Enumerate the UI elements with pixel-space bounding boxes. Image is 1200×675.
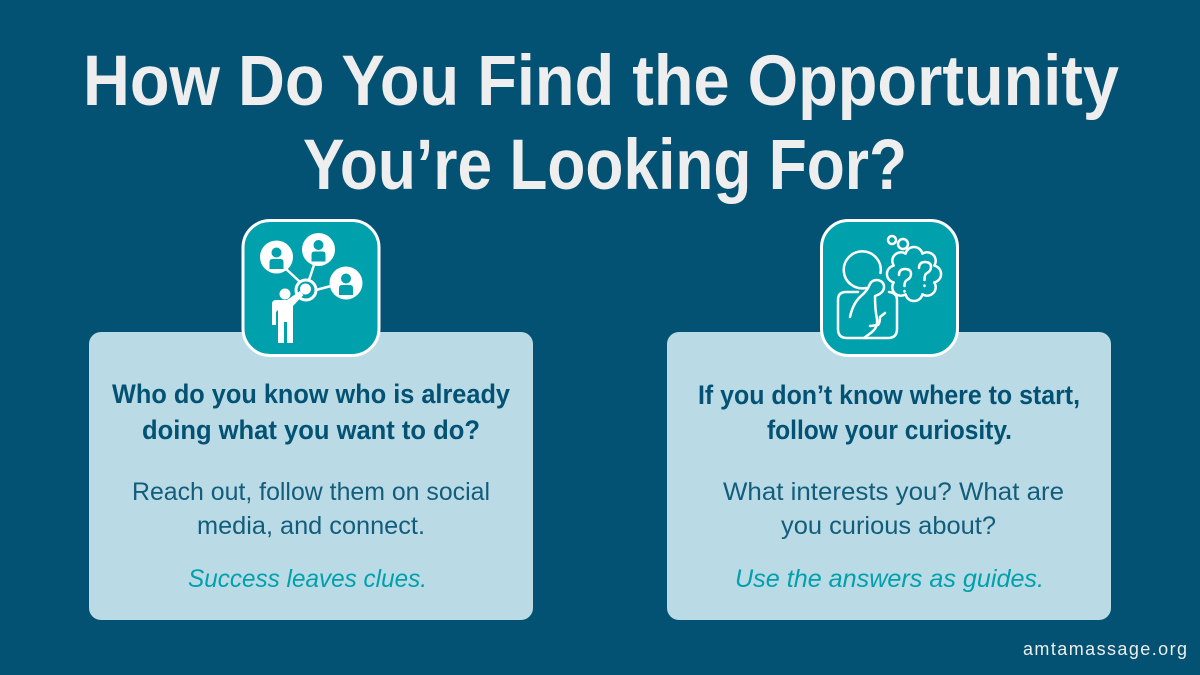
heading: who do you know: doing what you want to do?: [142, 415, 480, 445]
title: [83, 42, 1119, 205]
body text: what interests you: [723, 478, 1064, 540]
title: You’re Looking For?: [303, 126, 907, 205]
body text: what interests you: you curious about?: [781, 512, 996, 540]
website url: amtamassage.org: [1023, 639, 1187, 659]
heading: follow your curiosity: [698, 380, 1080, 445]
title: How Do You Find the Opportunity: [83, 42, 1119, 121]
body text: reach out: Reach out, follow them on social: [132, 478, 490, 506]
icon: person connecting to network: [243, 220, 379, 356]
body text: reach out: [132, 478, 490, 540]
heading: follow your curiosity: If you don’t know where to start,: [698, 380, 1080, 410]
icon: person thinking with question marks: [822, 220, 958, 356]
body text: what interests you: What interests you? What are: [723, 478, 1064, 506]
panel: who do you know: [89, 332, 533, 620]
tagline: use the answers as guides: Use the answers as guides.: [735, 565, 1044, 593]
panel: follow your curiosity: [667, 332, 1111, 620]
body text: reach out: media, and connect.: [197, 512, 425, 540]
heading: who do you know: [112, 379, 510, 445]
heading: follow your curiosity: follow your curiosity.: [767, 415, 1012, 445]
heading: who do you know: Who do you know who is already: [112, 379, 510, 409]
tagline: success leaves clues: Success leaves clues.: [188, 565, 427, 593]
